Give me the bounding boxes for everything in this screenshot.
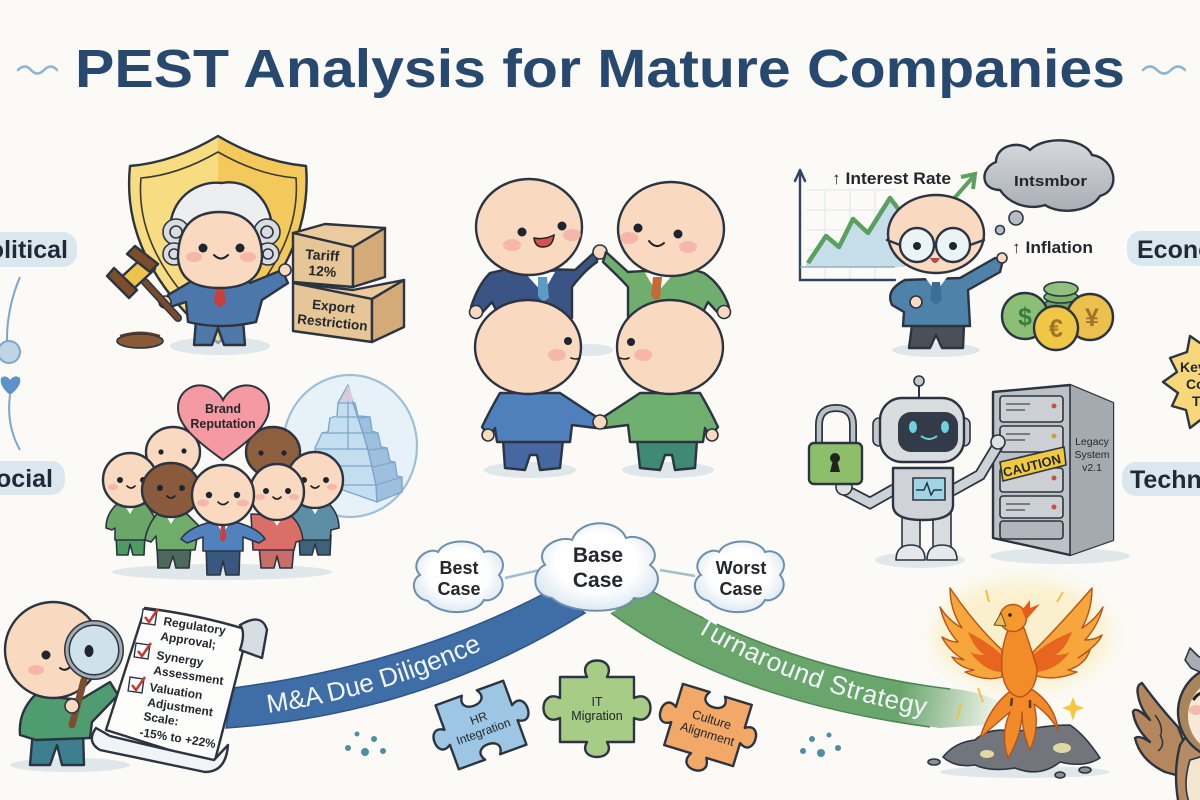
person: blue suit centre	[181, 465, 265, 575]
icon: legacy server rack	[993, 385, 1113, 555]
label: Social	[0, 461, 65, 495]
puzzle piece: Culture Alignment: Alignment	[679, 719, 736, 749]
cloud: Best Case: Case	[437, 579, 481, 599]
icon: checkboxes	[128, 609, 157, 693]
icon: culture pyramid in glass sphere	[283, 375, 417, 517]
icon: brand reputation heart: Reputation	[190, 417, 256, 431]
icon: currency coins: €	[1049, 315, 1063, 343]
connector: scenario lines	[505, 570, 695, 578]
cloud: Best Case: Best	[439, 558, 479, 578]
cloud: Best Case	[414, 542, 503, 612]
puzzle piece: IT Migration: Migration	[571, 709, 623, 723]
icon: tariff box: Tariff	[305, 246, 340, 264]
cloud: storm thought bubble: Intsmbor	[1014, 173, 1087, 190]
ash pile	[928, 725, 1110, 778]
cloud: Worst Case	[695, 542, 784, 612]
illustration: due diligence character with checklist scroll	[5, 602, 267, 772]
icon: yellow shield	[129, 136, 307, 343]
text: checklist items: Adjustment	[147, 695, 214, 719]
cloud: Base Case: Base	[573, 544, 623, 567]
puzzle piece: IT Migration	[544, 660, 650, 757]
figure: bottom right green	[593, 393, 718, 470]
figure: top right green	[603, 252, 730, 318]
icon: gavel	[107, 246, 178, 348]
people: back row	[146, 427, 300, 477]
ribbon: Turnaround Strategy	[610, 592, 998, 728]
illustration: economic analyst with chart, coins	[795, 140, 1113, 357]
decorative dots	[345, 732, 841, 757]
icon: judge character	[159, 182, 291, 345]
chart: rising interest rate: ↑ Interest Rate	[832, 169, 951, 188]
icon: tariff box: 12%	[308, 262, 337, 280]
badge: key core tech starburst	[1163, 331, 1200, 430]
phoenix	[940, 588, 1103, 758]
icon: export restriction box: Restriction	[297, 311, 368, 334]
cloud: storm thought bubble	[984, 140, 1113, 234]
cloud: Base Case	[535, 523, 658, 611]
illustration: owl mascot	[1133, 648, 1200, 800]
icon: green padlock	[809, 408, 862, 484]
text: inflation up: ↑ Inflation	[1012, 238, 1093, 257]
caution tape: CAUTION	[1001, 451, 1062, 480]
title: PEST Analysis for Mature Companies	[75, 39, 1125, 99]
icon: export restriction box: Export	[311, 297, 356, 316]
icon: tariff box	[293, 224, 385, 287]
cloud: Worst Case: Case	[719, 579, 763, 599]
character: analyst with glasses	[887, 195, 1007, 348]
head: top right	[618, 182, 724, 276]
character: robot	[836, 376, 1005, 560]
figure: bottom left blue	[482, 393, 598, 470]
person: teal far right	[287, 452, 343, 555]
puzzle piece: HR Integration: Integration	[454, 715, 512, 748]
person: green far left	[103, 453, 157, 555]
text: checklist items: Scale:	[143, 709, 180, 728]
puzzle piece: Culture Alignment	[647, 680, 765, 784]
ribbon: Turnaround Strategy: Turnaround Strategy	[700, 617, 928, 719]
person: red suit	[250, 464, 304, 568]
icon: brand reputation heart	[178, 385, 269, 460]
text: checklist items: Regulatory	[163, 614, 227, 638]
chart: rising interest rate	[795, 169, 975, 280]
icon: legacy server rack: System	[1074, 449, 1110, 461]
cloud: Base Case: Case	[573, 569, 623, 592]
text: checklist items: Valuation	[149, 680, 203, 702]
label: Economic	[1127, 231, 1200, 266]
decorative wave: right of title	[1143, 66, 1185, 74]
cloud: Worst Case: Worst	[716, 558, 766, 578]
icon: brand reputation heart: Brand	[205, 402, 241, 416]
illustration: brand reputation group and pyramid	[103, 375, 417, 580]
text: checklist items: Approval;	[160, 629, 217, 652]
icon: currency coins: ¥	[1085, 304, 1099, 332]
text: checklist items: Assessment	[153, 663, 225, 688]
figure: top left navy	[470, 245, 607, 318]
decorative wave: left of title	[18, 66, 57, 74]
connector: political to social with bead and heart	[0, 277, 20, 450]
puzzle piece: Culture Alignment: Culture	[690, 707, 733, 732]
illustration: phoenix rising from ashes	[928, 580, 1110, 778]
icon: export restriction box	[293, 280, 404, 342]
icon: currency coins	[1002, 282, 1113, 350]
puzzle piece: HR Integration	[423, 676, 539, 774]
text: checklist items	[139, 614, 227, 751]
icon: legacy server rack: v2.1	[1082, 462, 1102, 474]
illustration: robot with lock and legacy server	[809, 376, 1130, 568]
person: dark skin green suit	[142, 463, 200, 568]
illustration: judge with shield and tariff boxes	[107, 136, 404, 355]
ribbon: M&A Due Diligence	[225, 594, 586, 729]
icon: currency coins: $	[1018, 303, 1032, 331]
document: checklist scroll	[92, 608, 267, 772]
puzzle piece: IT Migration: IT	[591, 695, 603, 709]
ribbon: M&A Due Diligence: M&A Due Diligence	[267, 639, 480, 713]
puzzle piece: HR Integration: HR	[468, 709, 489, 728]
head: bottom right	[617, 300, 723, 394]
icon: legacy server rack: Legacy	[1075, 436, 1110, 448]
text: checklist items: Synergy	[156, 648, 205, 669]
illustration: four cooperating executives	[470, 179, 730, 478]
head: top left	[476, 179, 582, 275]
head: bottom left	[475, 300, 581, 394]
character: analyst with magnifying glass	[5, 602, 121, 765]
text: checklist items: -15% to +22%	[139, 725, 217, 751]
